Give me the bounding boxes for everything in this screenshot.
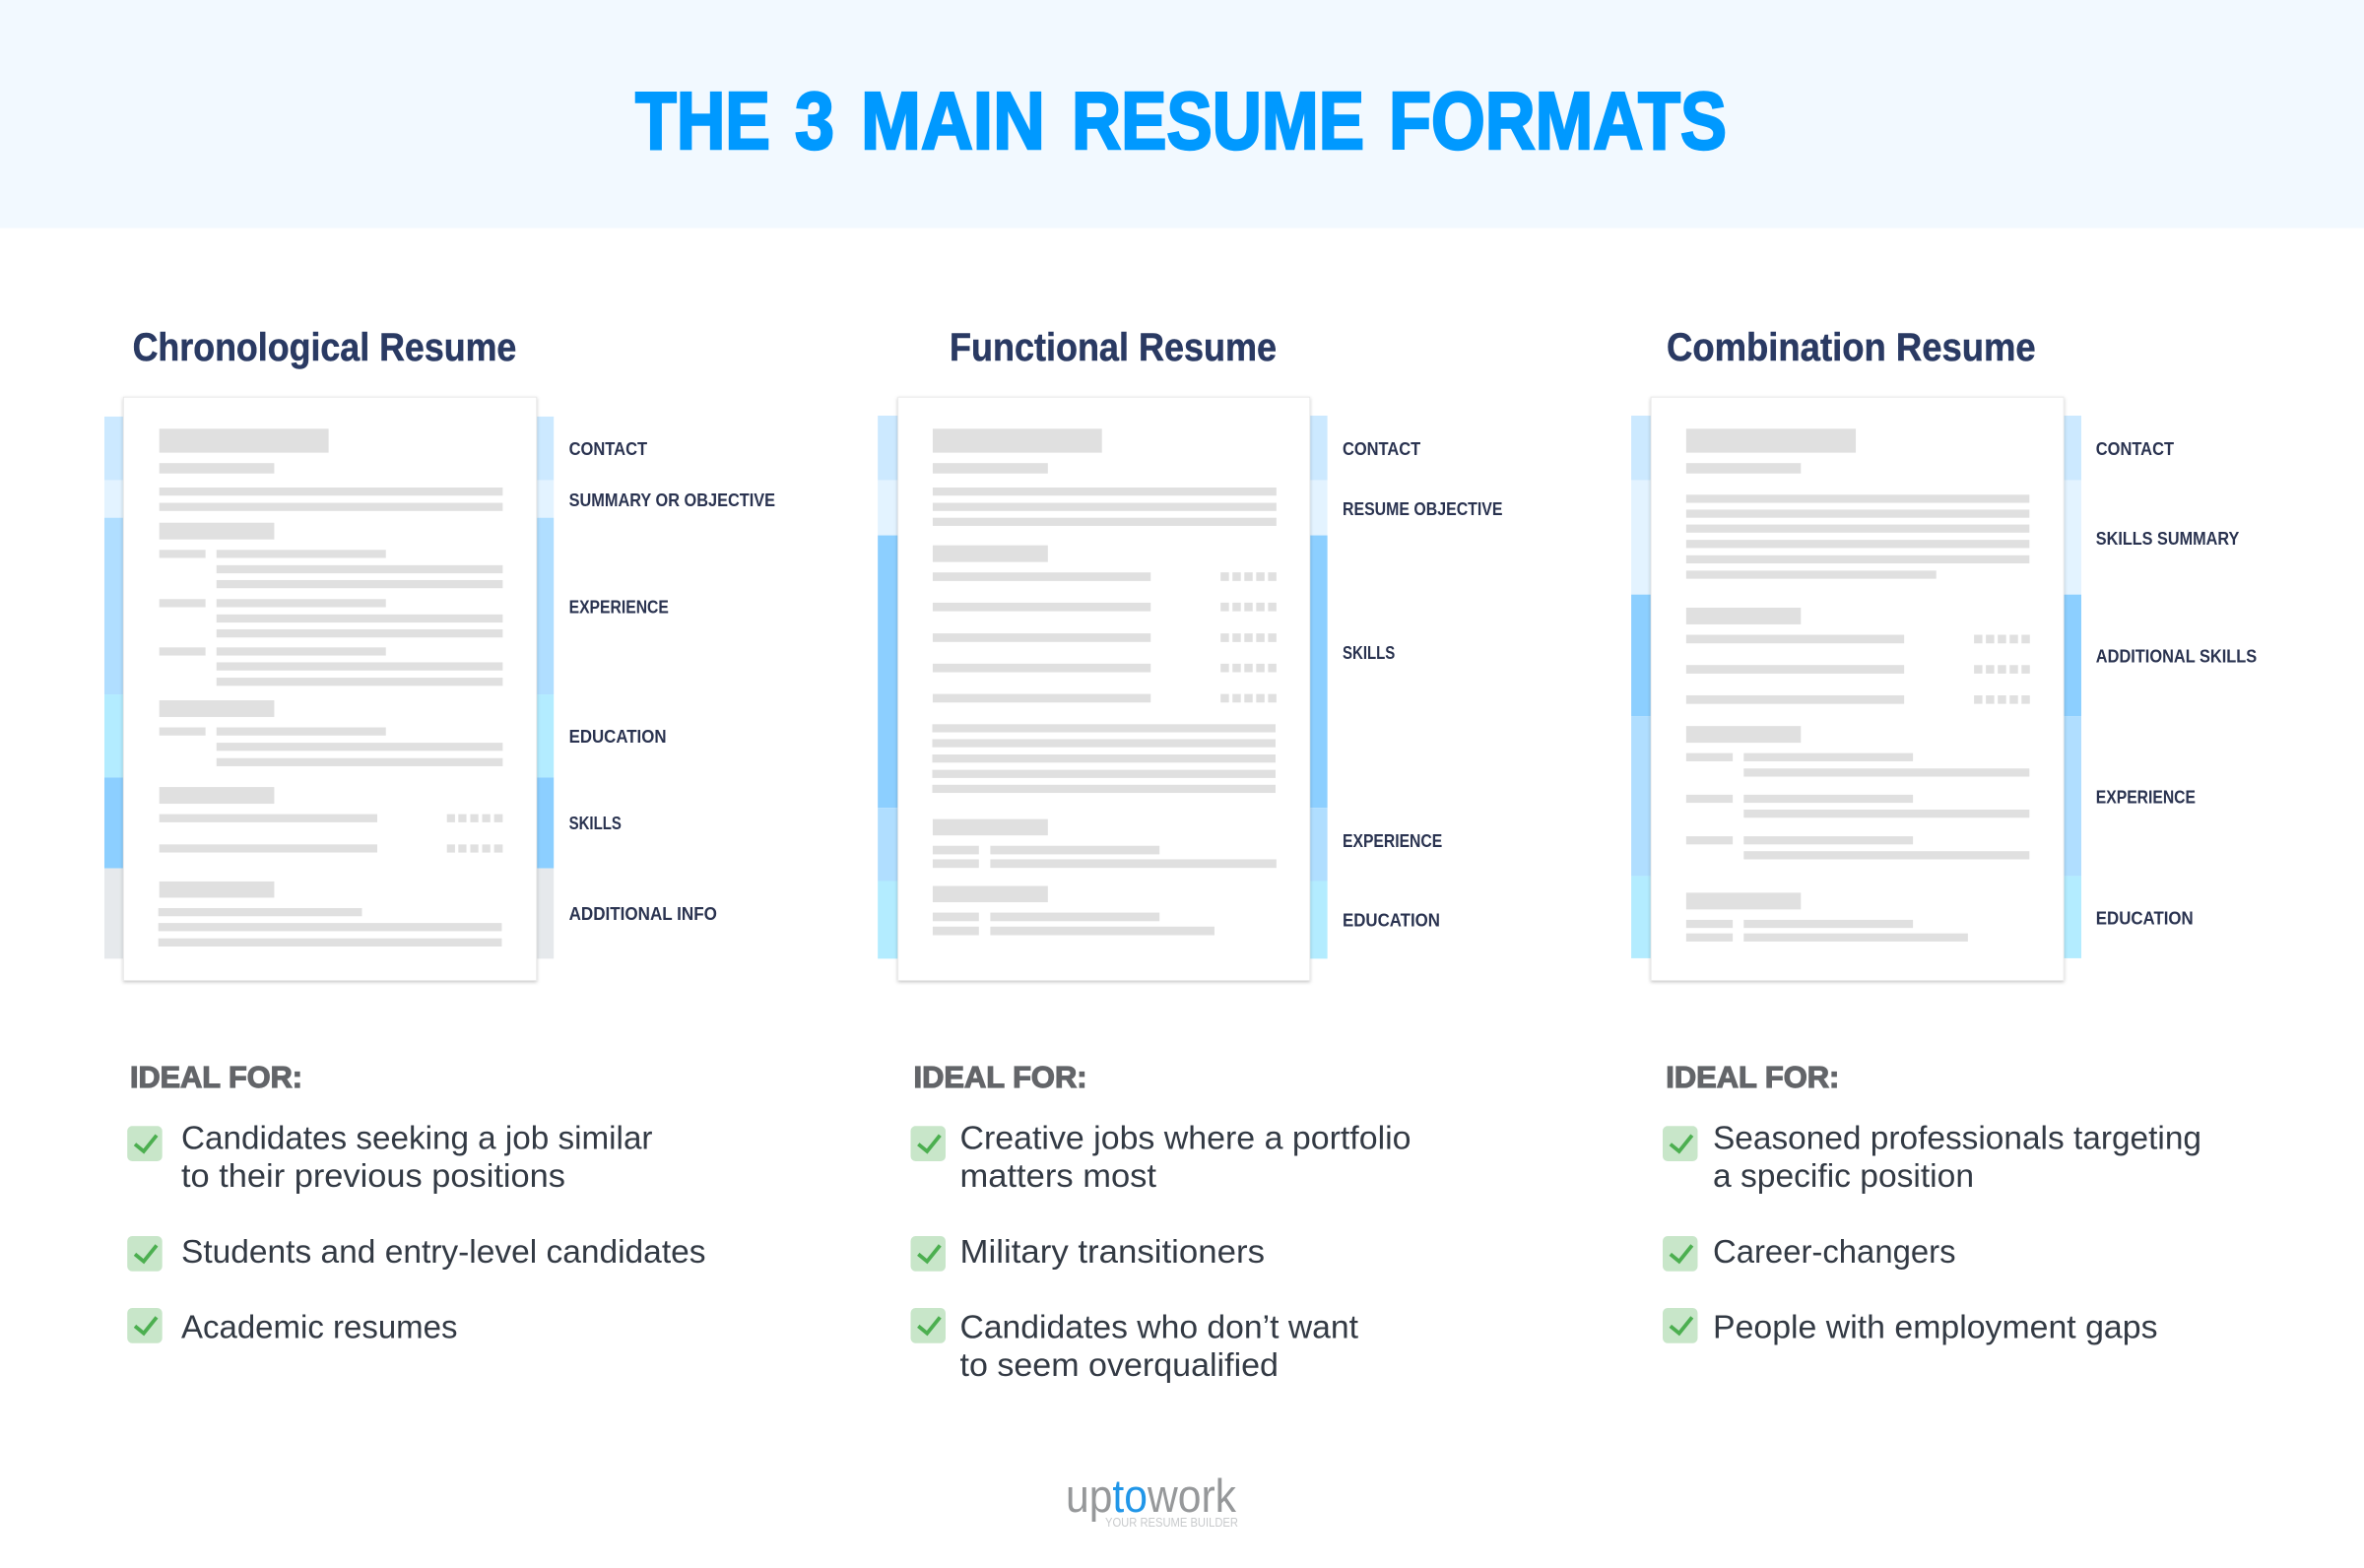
- section labels: chronological: EDUCATION: [569, 727, 666, 747]
- item text: Seasoned professionals targeting: [1713, 1119, 2201, 1156]
- resume sheet: [123, 397, 537, 980]
- section labels: combination: EXPERIENCE: [2096, 788, 2196, 808]
- title: RESUME: [1072, 75, 1364, 166]
- item text: Candidates who don’t want: [959, 1308, 1358, 1345]
- section colour bands: [1631, 416, 2081, 958]
- placeholder text lines: [1686, 428, 2030, 942]
- item text: [959, 1308, 1358, 1383]
- section labels: combination: SKILLS SUMMARY: [2096, 529, 2239, 549]
- section labels: functional: CONTACT: [1343, 439, 1420, 459]
- item text: Students and entry-level candidates: [181, 1233, 705, 1270]
- section colour bands: [104, 417, 554, 958]
- item text: Career-changers: [1713, 1233, 1956, 1270]
- item text: [959, 1119, 1411, 1194]
- ideal for heading: IDEAL FOR:: [130, 1060, 302, 1094]
- section labels: functional: EDUCATION: [1343, 911, 1440, 931]
- resume diagram: combination: [1631, 397, 2081, 980]
- heading: chronological resume: Chronological Resume: [133, 326, 516, 369]
- icon: check: [1663, 1236, 1698, 1272]
- icon: check: [127, 1126, 163, 1161]
- panel: chronological resume: [104, 326, 775, 1345]
- heading: functional resume: Functional Resume: [950, 326, 1277, 369]
- item text: a specific position: [1713, 1157, 1974, 1194]
- item text: Military transitioners: [959, 1233, 1265, 1270]
- section labels: chronological: ADDITIONAL INFO: [569, 904, 717, 924]
- title: 3: [795, 75, 834, 166]
- item text: Creative jobs where a portfolio: [959, 1119, 1411, 1156]
- icon: check: [910, 1308, 946, 1343]
- section labels: chronological: SKILLS: [569, 814, 622, 833]
- ideal for heading: IDEAL FOR:: [914, 1060, 1087, 1094]
- icon: check: [910, 1126, 946, 1161]
- icon: check: [127, 1308, 163, 1343]
- item text: matters most: [959, 1157, 1156, 1194]
- item text: [181, 1119, 653, 1194]
- header band: [0, 0, 2364, 229]
- item text: to seem overqualified: [959, 1346, 1279, 1383]
- section labels: functional: SKILLS: [1343, 643, 1395, 663]
- section labels: combination: [2096, 439, 2257, 928]
- item text: Candidates seeking a job similar: [181, 1119, 653, 1156]
- title: MAIN: [861, 75, 1045, 166]
- panel: combination resume: [1631, 326, 2257, 1345]
- section labels: chronological: SUMMARY OR OBJECTIVE: [569, 490, 775, 510]
- ideal for list: functional: [910, 1060, 1411, 1383]
- item text: People with employment gaps: [1713, 1308, 2157, 1345]
- section labels: functional: EXPERIENCE: [1343, 831, 1442, 851]
- panel: functional resume: [878, 326, 1503, 1383]
- section labels: functional: RESUME OBJECTIVE: [1343, 499, 1503, 519]
- ideal for list: chronological: [127, 1060, 705, 1345]
- section labels: chronological: [569, 439, 775, 924]
- section labels: functional: [1343, 439, 1503, 931]
- logo: uptowork: YOUR RESUME BUILDER: [1105, 1516, 1238, 1530]
- heading: combination resume: Combination Resume: [1667, 326, 2036, 369]
- section colour bands: [878, 416, 1328, 958]
- resume diagram: functional: [878, 397, 1328, 980]
- section labels: chronological: CONTACT: [569, 439, 647, 459]
- icon: check: [1663, 1126, 1698, 1161]
- item text: Academic resumes: [181, 1308, 457, 1345]
- icon: check: [127, 1236, 163, 1272]
- item text: [1713, 1119, 2201, 1194]
- section labels: combination: ADDITIONAL SKILLS: [2096, 647, 2257, 667]
- ideal for list: combination: [1663, 1060, 2201, 1345]
- icon: check: [910, 1236, 946, 1272]
- section labels: combination: EDUCATION: [2096, 908, 2194, 928]
- title: FORMATS: [1389, 75, 1727, 166]
- section labels: combination: CONTACT: [2096, 439, 2174, 459]
- resume sheet: [898, 397, 1310, 980]
- title: [635, 75, 1727, 166]
- resume diagram: chronological: [104, 397, 554, 980]
- placeholder text lines: [159, 428, 502, 947]
- placeholder text lines: [932, 428, 1277, 936]
- title: THE: [635, 75, 770, 166]
- section labels: chronological: EXPERIENCE: [569, 598, 669, 618]
- logo: uptowork: uptowork: [1066, 1470, 1236, 1522]
- icon: check: [1663, 1308, 1698, 1343]
- ideal for heading: IDEAL FOR:: [1666, 1060, 1839, 1094]
- resume sheet: [1651, 397, 2064, 980]
- item text: to their previous positions: [181, 1157, 565, 1194]
